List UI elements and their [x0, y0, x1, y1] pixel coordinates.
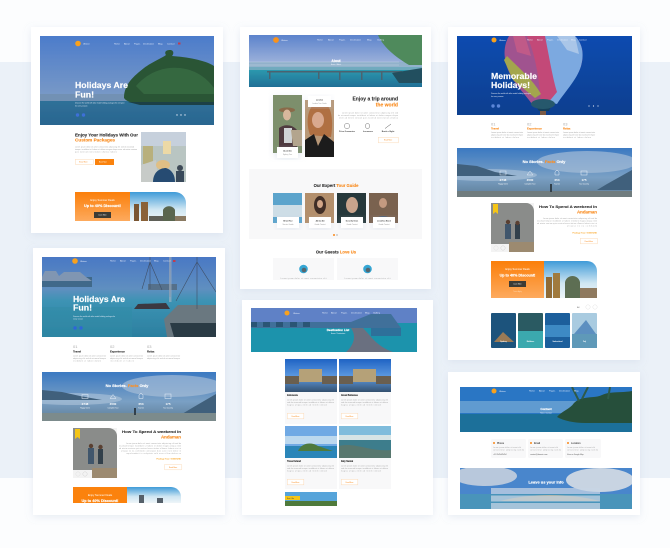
destination thumbnails: Sydney [500, 341, 507, 343]
heading: custom packages: Enjoy Your Holidays With Our [75, 132, 138, 138]
nav: logo and menu: Pages [339, 40, 346, 42]
banner: summer discount: Enjoy Summer Deals [505, 267, 530, 271]
stats band: 175 [165, 402, 171, 406]
slider controls [76, 113, 186, 117]
nav: logo and menu: Home [529, 390, 536, 392]
hero title: Holidays Are [73, 294, 125, 304]
article text: Lorem ipsum dolor sit amet consectetur adipiscing elit sed do [126, 442, 181, 445]
nav: logo and menu: Ulistee [499, 390, 506, 393]
stats band: Complete Tour [108, 406, 119, 410]
hero: hot air balloon [457, 36, 632, 115]
nav: logo and menu [492, 388, 579, 394]
stats band: 3500 [527, 178, 534, 182]
feature columns: Travel [73, 350, 81, 354]
destination card: Italy Santai [339, 426, 391, 489]
feature columns: Relax [563, 126, 571, 130]
caption card: Australia: Sydney Tour [283, 153, 293, 156]
contact card: phone: consectetur adipiscing sed do [493, 448, 524, 452]
feature columns: incididunt ut labore dolore [491, 136, 519, 139]
article text: reprehenderit in voluptate velit esse cillum dolore eu [126, 452, 181, 455]
feature columns: Experience [110, 350, 125, 354]
button [580, 238, 597, 244]
feature icons [339, 123, 395, 133]
contact form band: Leave us your info [528, 480, 564, 484]
text block: enim ad minim veniam quis nostrud exercitation ullamco [339, 116, 398, 120]
article text [537, 217, 598, 228]
banner: summer discount [75, 192, 186, 221]
button: Read More [384, 139, 392, 142]
stats band: Tour Country [579, 182, 589, 186]
destination card: Italy Santai: Read More [346, 482, 354, 484]
article heading: How To Spend A weekend In [539, 204, 598, 209]
feature columns: incididunt ut labore dolore [73, 360, 101, 362]
stats band: Tour Country [163, 406, 173, 410]
hero: hot air balloon: Discover the world with tailor made holiday packages [491, 92, 531, 95]
feature columns: Lorem ipsum dolor sit amet consectetur [147, 354, 180, 358]
heading: tour guide: Our Expert Tour Guide [314, 183, 359, 188]
guide captions [277, 217, 395, 228]
text block: Lorem ipsum dolor sit amet consectetur adipiscing elit sed [342, 112, 398, 114]
guide captions: Dorothy Dean [346, 220, 359, 222]
destination card: Indonesia: magna aliqua enim ad minim veniam [287, 404, 328, 406]
caption card: London [308, 96, 331, 107]
panel: home page preview two [22, 248, 225, 515]
hero: palms by the sea: Home / Contact [540, 412, 552, 414]
article heading: Andaman [161, 434, 181, 440]
feature icons: Insurance [363, 130, 374, 133]
stats band: Tourism [138, 406, 145, 410]
nav: logo and menu [75, 41, 180, 46]
article text: eiusmod tempor incididunt ut labore et dolore magna aliqua enim [119, 444, 182, 448]
feature icons: Book a flight [382, 130, 395, 133]
destination card: Travel Island: sed do eiusmod tempor incididunt ut labore et dolore [287, 467, 334, 470]
feature columns: 03 [147, 344, 152, 349]
nav: logo and menu: Contact [167, 42, 175, 46]
panel: destination page preview [242, 300, 433, 515]
destination card: Indonesia [285, 359, 337, 424]
destination thumbnails [491, 313, 597, 348]
contact card: phone [491, 439, 526, 458]
hero title: Contact [540, 407, 552, 411]
article heading: Andaman [577, 210, 597, 214]
button: Read More [585, 240, 593, 243]
banner: summer discount: Up to 40% Discount! [84, 204, 121, 208]
nav: logo and menu: Pages [134, 44, 141, 46]
destination card: Travel Island [285, 426, 337, 489]
nav: logo and menu: Destination [557, 38, 569, 42]
nav: logo and menu: Blog [365, 312, 370, 314]
caption card: Australia [277, 147, 298, 158]
heading: enjoy a trip: Enjoy a trip around [352, 96, 398, 102]
caption card: London: London [316, 100, 324, 102]
contact form band [460, 468, 632, 509]
button: Read More [169, 466, 177, 469]
nav: logo and menu: Gallery [377, 38, 385, 42]
feature columns: Lorem ipsum dolor sit amet consectetur [110, 354, 143, 358]
destination card: Travel Island: Travel Island [287, 461, 302, 463]
nav: logo and menu: Ulistee [281, 39, 288, 42]
contact card: email: consectetur adipiscing sed do [530, 448, 561, 452]
article text: Lorem ipsum dolor sit amet consectetur adipiscing elit sed do [543, 217, 597, 220]
photo: traveller with map [141, 132, 186, 182]
slider controls [491, 104, 599, 108]
contact card: email: contact@domain.com [530, 453, 548, 456]
destination card: Travel Island: Lorem ipsum dolor sit amet consectetur adipiscing elit [287, 464, 335, 468]
nav: logo and menu: Home [322, 312, 329, 314]
destination card: Indonesia: Read More [292, 416, 300, 418]
nav: logo and menu: Blog [158, 44, 163, 46]
nav: logo and menu: About [537, 38, 543, 42]
caption card: Australia: Australia [283, 150, 293, 152]
feature columns: Lorem ipsum dolor sit amet consectetur [491, 131, 523, 134]
stats band: Complete Tour [525, 182, 536, 186]
stats band [42, 372, 216, 421]
nav: logo and menu: Home [114, 44, 121, 46]
nav: logo and menu [72, 258, 176, 264]
article heading [122, 429, 182, 440]
feature columns: adipiscing elit sed do eiusmod tempor [491, 134, 523, 136]
article heading [539, 204, 598, 214]
button [378, 137, 398, 143]
destination card: Great Bahamas: Great Bahamas [341, 394, 359, 397]
stats band: Happy Client [498, 182, 508, 186]
pager dots [333, 234, 338, 236]
buttons: Book Now [99, 162, 107, 164]
destination card: Italy Santai: sed do eiusmod tempor incididunt ut labore et dolore [341, 467, 388, 470]
nav: logo and menu: Blog [154, 260, 159, 262]
feature columns: adipiscing elit sed do eiusmod tempor [73, 357, 106, 360]
destination card: Italy Santai: Lorem ipsum dolor sit amet consectetur adipiscing elit [341, 464, 389, 468]
hero: island: Fun! [75, 90, 94, 100]
destination card: Indonesia: sed do eiusmod tempor incididunt ut labore et dolore [287, 401, 334, 404]
contact card: email: Lorem ipsum dolor sit amet elit [530, 446, 559, 449]
feature columns: incididunt ut labore dolore [563, 136, 591, 139]
feature columns: Travel [491, 126, 499, 130]
feature columns: 01 [73, 344, 78, 349]
heading: custom packages [75, 132, 138, 142]
text block: tempor incididunt ut labore et dolore magna aliqua enim ad minim veniam [75, 148, 138, 151]
guide captions: Adrian Ali [316, 220, 325, 222]
destination card: Indonesia: Lorem ipsum dolor sit amet consectetur adipiscing elit [287, 398, 335, 402]
feature columns: 02 [110, 344, 115, 349]
price line: Package Tour: $1000/USD [572, 232, 598, 234]
nav: logo and menu: Destination [143, 42, 155, 46]
stats band: No Stories. Facts Only [523, 159, 566, 164]
text block: quis nostrud exercitation ullamco laboris [75, 150, 117, 154]
destination thumbnails: Fuji [583, 341, 587, 343]
destination card: Great Bahamas [339, 359, 391, 424]
contact card: location: View on Google Map [567, 454, 584, 456]
buttons [75, 159, 114, 165]
feature columns: adipiscing elit sed do eiusmod tempor [527, 134, 559, 136]
nav: logo and menu [284, 310, 381, 316]
article text: ad minim veniam quis nostrud exercitation ullamco laboris nisi ut [119, 447, 182, 450]
article text: aliquip ex ea commodo [567, 226, 597, 228]
banner: summer discount cropped: Enjoy Summer Deals [88, 493, 113, 497]
stats band: Happy Client [80, 406, 90, 410]
article heading: How To Spend A weekend In [122, 429, 182, 434]
stats band [457, 148, 632, 197]
hero title: Destination List [327, 328, 349, 332]
hero: palms by the sea [460, 387, 632, 432]
guide captions: Senior Guide [282, 223, 294, 226]
contact card: email: Email [534, 443, 540, 445]
destination card: Great Bahamas: Read More [346, 416, 354, 418]
nav: logo and menu: Pages [547, 40, 554, 42]
panel: home page preview three [437, 27, 640, 360]
contact card: location: Lorem ipsum dolor sit amet elit [567, 446, 596, 449]
button [164, 464, 182, 470]
destination card: Great Bahamas: sed do eiusmod tempor incididunt ut labore et dolore [341, 401, 388, 404]
text block: do eiusmod tempor incididunt ut labore et dolore magna aliqua [338, 114, 398, 117]
heading: enjoy a trip [352, 96, 398, 108]
photo: red haired woman [305, 100, 334, 157]
hero title: About [331, 59, 342, 63]
feature columns: 01 [491, 122, 496, 126]
destination card: Italy Santai: Italy Santai [341, 460, 353, 463]
nav: logo and menu: Destination [140, 260, 152, 262]
article text: ad minim veniam quis nostrud exercitation ullamco laboris nisi ut [537, 222, 598, 225]
hero: hot air balloon: for every season [491, 95, 504, 98]
hero: island [40, 36, 214, 125]
guide captions: Jonathan Bond [377, 220, 392, 222]
nav: logo and menu: Pages [549, 390, 556, 392]
article text [119, 442, 182, 455]
panel: contact page preview [448, 372, 640, 515]
hero: island: Discover the world with tailor made holiday packages for everyone [75, 102, 125, 104]
banner: summer discount: Up to 40% Discount! [500, 274, 535, 278]
banner: summer discount: Terms Apply [513, 290, 522, 293]
nav: logo and menu: Home [527, 40, 534, 42]
banner: summer discount: Enjoy Summer Deals [90, 198, 115, 202]
hero: water villas: Home / Destination [331, 332, 345, 335]
nav: logo and menu: Ulistee [499, 39, 506, 42]
hero: boats at sea [42, 257, 216, 337]
nav: logo and menu: Gallery [373, 312, 381, 314]
feature columns: incididunt ut labore [110, 360, 134, 362]
destination card: Travel Island: Read More [292, 482, 300, 484]
guide captions: Guide Tourist [378, 223, 390, 226]
panel: about page preview [240, 27, 431, 289]
testimonial cards: Lorem ipsum dolor sit amet consectetur elit [344, 277, 391, 280]
nav: logo and menu: Destination [350, 38, 362, 42]
banner: summer discount: Learn More [98, 214, 107, 216]
contact card: location: Location [571, 442, 581, 445]
carousel arrows [577, 305, 597, 309]
destination card: Great Bahamas: magna aliqua enim ad minim veniam [341, 404, 382, 406]
feature columns: Lorem ipsum dolor sit amet consectetur [73, 354, 106, 358]
nav: logo and menu: Destination [351, 312, 363, 314]
hero: boats at sea: Fun! [73, 302, 92, 312]
testimonial cards [273, 258, 398, 280]
testimonial cards: Lorem ipsum dolor sit amet consectetur elit [280, 277, 327, 280]
hero: bridge over sea: Home / About [331, 63, 342, 66]
contact card: phone: +91 8545445454 [493, 454, 507, 456]
banner: summer discount: Learn More [513, 284, 522, 286]
nav: logo and menu: Blog [367, 40, 372, 42]
feature columns: 02 [527, 122, 532, 126]
contact card: location: consectetur adipiscing sed do [567, 448, 598, 452]
nav: logo and menu: Contact [579, 38, 587, 42]
guide captions: Brian Rice [283, 220, 293, 222]
nav: logo and menu [273, 37, 385, 43]
photo: couple [73, 428, 117, 478]
nav: logo and menu: Contact [163, 260, 171, 262]
nav: logo and menu: Blog [571, 40, 576, 42]
nav: logo and menu: Destination [559, 390, 571, 392]
panel: tour guides [249, 169, 422, 239]
nav: logo and menu: Home [317, 40, 324, 42]
feature columns: Lorem ipsum dolor sit amet consectetur [527, 131, 559, 134]
heading: enjoy a trip: the world [376, 102, 398, 108]
carousel arrows: All [577, 306, 580, 309]
nav: logo and menu: Pages [341, 312, 348, 314]
article text: eiusmod tempor incididunt ut labore et dolore magna aliqua enim [537, 220, 598, 222]
feature columns: Lorem ipsum dolor sit amet consectetur [563, 131, 595, 134]
destination card: Italy Santai: magna aliqua enim ad minim veniam [341, 470, 382, 472]
slider controls [73, 326, 83, 330]
nav: logo and menu [492, 38, 587, 42]
feature columns: adipiscing elit sed do eiusmod tempor [563, 134, 595, 136]
guide captions: Guide Tourist [346, 223, 358, 226]
feature columns: adipiscing elit sed do eiusmod tempor [110, 357, 143, 360]
article text: aliquip ex ea commodo consequat duis aute irure dolor in [121, 450, 181, 452]
stats band: 653 [138, 402, 144, 406]
nav: logo and menu: About [120, 260, 126, 262]
text block [75, 146, 138, 154]
photo: woman with hat [273, 95, 302, 153]
nav: logo and menu: Ulistee [293, 312, 300, 315]
stats band: 175 [581, 178, 587, 182]
buttons: Know More [79, 160, 88, 164]
destination card: Indonesia: Indonesia [287, 395, 298, 397]
stats band: Tourism [554, 182, 561, 186]
destination thumbnails: Maldives [527, 341, 534, 343]
text block [338, 112, 398, 120]
nav: logo and menu: Pages [130, 260, 137, 262]
stats band: No Stories. Facts Only [106, 383, 149, 388]
panel: home page preview one [31, 27, 223, 233]
hero title: Memorable [491, 72, 537, 81]
feature columns [73, 344, 180, 362]
feature columns: Relax [147, 350, 155, 354]
feature icons: Price Guarantee [339, 130, 356, 133]
nav: logo and menu: About [124, 42, 130, 46]
banner: summer discount [491, 261, 597, 298]
stats band: 3500 [110, 402, 117, 406]
feature columns: Experience [527, 126, 542, 130]
feature columns: incididunt ut labore dolore [527, 136, 555, 139]
hero: island: for every season [75, 104, 88, 108]
contact card: phone: Lorem ipsum dolor sit amet elit [493, 446, 522, 449]
photo: couple [491, 203, 534, 252]
hero: bridge over sea [249, 35, 422, 87]
destination card: Travel Island: magna aliqua enim ad minim veniam [287, 470, 328, 472]
text block: Lorem ipsum dolor sit amet consectetur adipiscing elit sed do eiusmod [75, 146, 134, 148]
hero: water villas [251, 308, 417, 352]
guide photos [273, 193, 398, 223]
feature columns [491, 122, 595, 139]
guide captions: Guide Tourist [314, 223, 326, 226]
nav: logo and menu: About [539, 390, 545, 392]
feature columns: 03 [563, 122, 568, 126]
contact card: phone: Phone [497, 443, 505, 445]
heading: guests love us: Our Guests Love Us [316, 250, 357, 254]
hero title: Holidays Are [75, 80, 128, 90]
nav: logo and menu: Ulistee [80, 260, 87, 263]
hero: hot air balloon: Holidays! [491, 81, 530, 90]
stats band: 2748 [82, 402, 89, 406]
feature columns: adipiscing elit sed do eiusmod tempor [147, 357, 180, 360]
price line: Package Tour: $1000/USD [156, 458, 182, 460]
stats band: 2748 [500, 178, 507, 182]
destination thumbnails: Switzerland [552, 340, 562, 343]
stats band: 653 [554, 178, 560, 182]
nav: logo and menu: About [331, 312, 337, 314]
nav: logo and menu: Home [110, 260, 117, 262]
hero: boats at sea: Discover the world with tailor made holiday packages for [73, 315, 116, 318]
nav: logo and menu: Ulistee [83, 42, 90, 46]
destination card: cropped: Best Offer [287, 497, 295, 500]
contact card: email [528, 439, 563, 458]
heading: custom packages: Custom Packages [75, 138, 116, 142]
destination card: Great Bahamas: Lorem ipsum dolor sit amet consectetur adipiscing elit [341, 398, 389, 402]
nav: logo and menu: About [328, 38, 334, 42]
contact card: location [565, 439, 601, 458]
banner: summer discount cropped: Up to 40% Discount! [82, 499, 118, 503]
banner: summer discount cropped [73, 487, 181, 503]
nav: logo and menu: Blog [574, 390, 579, 392]
hero: boats at sea: every season [73, 318, 83, 320]
caption card: London: London Tour Guide [312, 102, 327, 105]
destination card: cropped [285, 492, 337, 506]
